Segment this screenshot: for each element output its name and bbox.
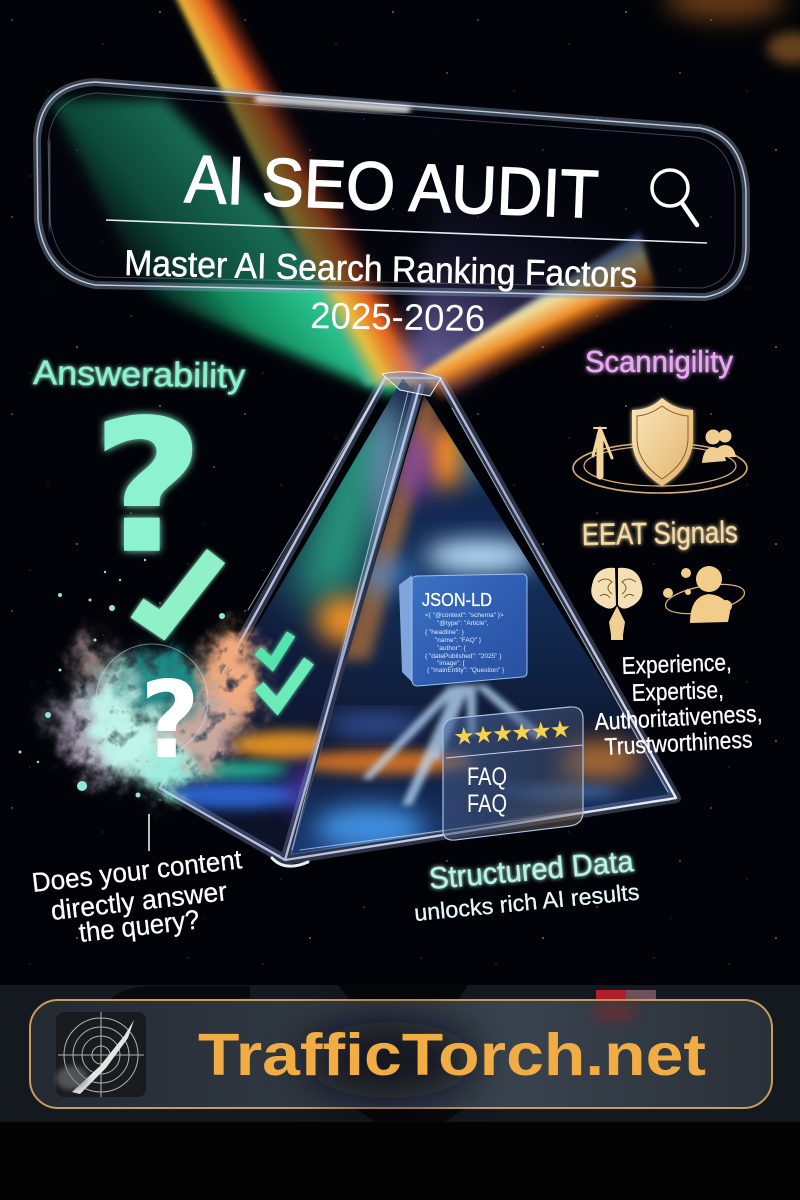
icon: shield bbox=[632, 398, 693, 486]
code lines: { "headline": } bbox=[425, 629, 465, 636]
JSON-LD heading: JSON-LD bbox=[422, 590, 492, 610]
title divider bbox=[106, 220, 707, 243]
icon: tripod tower bbox=[593, 428, 612, 476]
JSON-LD card bbox=[399, 574, 527, 686]
search bar panel bbox=[37, 82, 746, 297]
prism left face bbox=[160, 379, 420, 858]
icon: magnifying glass bbox=[652, 170, 697, 225]
heading: scannigility: Scannigility bbox=[585, 344, 733, 379]
FAQ card: FAQ bbox=[467, 790, 507, 818]
code lines: { "mainEntity": "Question" } bbox=[427, 667, 505, 674]
icon: small check top bbox=[258, 634, 291, 664]
code lines: "name": "FAQ" } bbox=[435, 637, 482, 644]
code lines bbox=[425, 612, 505, 674]
connector tick bbox=[148, 814, 150, 851]
code lines: "image": [ bbox=[437, 660, 465, 667]
prism edges bbox=[160, 372, 676, 866]
icon: white question mark: ? bbox=[140, 659, 200, 782]
answerability caption: Does your content bbox=[30, 844, 244, 898]
EEAT definition: Experience, bbox=[621, 649, 732, 680]
code lines: "author": { bbox=[437, 645, 467, 652]
desk strip bbox=[0, 985, 800, 1122]
icon group: shield ring bbox=[573, 398, 747, 493]
icon: large check bbox=[137, 556, 216, 625]
structured data caption: unlocks rich AI results bbox=[413, 878, 640, 926]
code lines: <{ "@context": "schema" }> bbox=[425, 612, 504, 619]
explosion cloud bbox=[18, 559, 260, 798]
heading: answerability: Answerability bbox=[33, 354, 245, 396]
title: AI SEO AUDIT bbox=[183, 141, 600, 233]
FAQ card bbox=[443, 707, 583, 840]
EEAT definition: Expertise, bbox=[631, 677, 724, 707]
prism bbox=[150, 370, 690, 870]
structured data heading: Structured Data bbox=[428, 843, 636, 896]
subtitle: Master AI Search Ranking Factors bbox=[124, 242, 638, 295]
FAQ lines: FAQ bbox=[467, 763, 507, 791]
code lines: "@type": "Article", bbox=[437, 620, 489, 627]
icon: small check bottom bbox=[259, 661, 309, 706]
logo: radar target bbox=[56, 1012, 146, 1097]
icon: brain with pen bbox=[591, 568, 642, 640]
icon: person with orbs bbox=[663, 566, 747, 623]
icon: large question mark: ? bbox=[92, 381, 204, 593]
brand name: TrafficTorch.net bbox=[198, 1022, 706, 1088]
footer panel bbox=[30, 1000, 772, 1108]
EEAT definition: Authoritativeness, bbox=[594, 700, 763, 736]
heading: EEAT signals: EEAT Signals bbox=[582, 514, 738, 552]
EEAT definition bbox=[594, 649, 763, 761]
answerability caption: directly answer bbox=[49, 876, 229, 926]
EEAT definition: Trustworthiness bbox=[604, 726, 753, 761]
answerability caption bbox=[30, 844, 244, 948]
prism right face bbox=[290, 396, 674, 855]
icon: people bbox=[702, 430, 736, 463]
answerability caption: the query? bbox=[77, 904, 201, 948]
black bottom band bbox=[0, 1122, 800, 1200]
rating stars: ★★★★★★ bbox=[452, 715, 572, 751]
subtitle years: 2025-2026 bbox=[310, 295, 486, 339]
prism light beams bbox=[50, 0, 660, 418]
light rays bbox=[362, 685, 545, 805]
code lines: { "datePublished": "2025" } bbox=[425, 653, 502, 660]
